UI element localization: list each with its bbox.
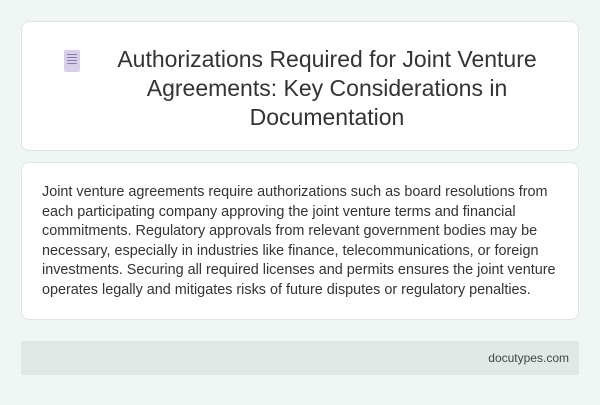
panel: description — [21, 162, 579, 320]
text block: Joint venture agreements require authorizations such as board resolutions from each participating company approving the joint venture terms and financial commitments. Regulatory approvals from relevant government bodies may be necessary, especially in industries like finance, telecommunications, or foreign investments. Securing all required licenses and permits ensures the joint venture operates legally and mitigates risks of future disputes or regulatory penalties. — [42, 184, 556, 298]
footer text: docutypes.com — [488, 351, 569, 365]
icon: document — [64, 50, 80, 72]
panel: title — [21, 21, 579, 151]
title heading: Authorizations Required for Joint Venture Agreements: Key Considerations in Documentation — [117, 46, 537, 130]
footer — [21, 341, 579, 375]
